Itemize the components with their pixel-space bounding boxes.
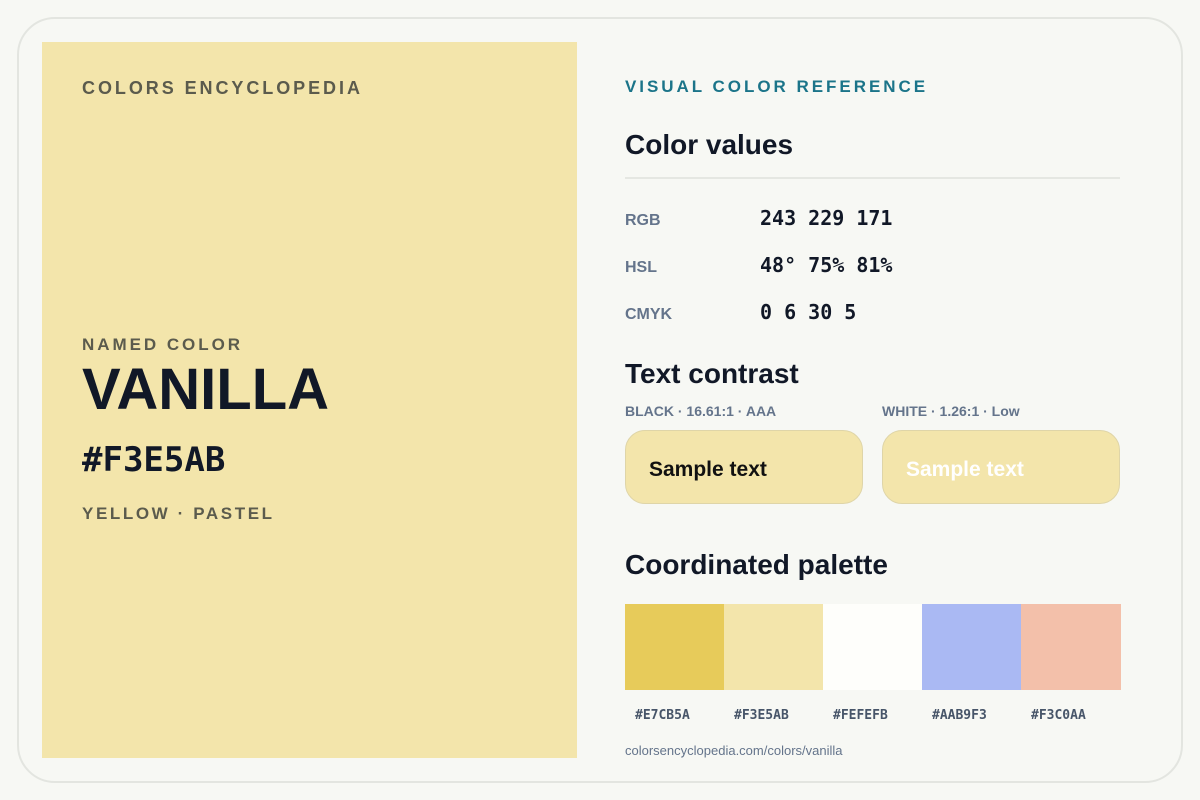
RGB label: RGB bbox=[625, 212, 661, 229]
color name: VANILLA bbox=[82, 357, 329, 422]
CMYK label: CMYK bbox=[625, 306, 672, 323]
palette bbox=[625, 604, 1121, 723]
eyebrow: VISUAL COLOR REFERENCE bbox=[625, 77, 928, 96]
heading: text contrast: Text contrast bbox=[625, 358, 799, 389]
hex code: #F3E5AB bbox=[82, 440, 225, 480]
contrast sample: white bbox=[882, 430, 1120, 504]
hex 3: #FEFEFB bbox=[833, 708, 888, 723]
contrast sample: white: Sample text bbox=[906, 458, 1024, 481]
CMYK value: 0 6 30 5 bbox=[760, 300, 856, 324]
source url: colorsencyclopedia.com/colors/vanilla bbox=[625, 743, 842, 758]
values table bbox=[625, 206, 892, 324]
HSL value: 48° 75% 81% bbox=[760, 253, 892, 277]
contrast sample: black bbox=[625, 430, 863, 504]
hex 5: #F3C0AA bbox=[1031, 708, 1086, 723]
contrast label: white: WHITE · 1.26:1 · Low bbox=[882, 403, 1020, 419]
hex 4: #AAB9F3 bbox=[932, 708, 987, 723]
RGB value: 243 229 171 bbox=[760, 206, 892, 230]
HSL label: HSL bbox=[625, 259, 657, 276]
swatch 3 bbox=[823, 604, 922, 690]
swatch 1 bbox=[625, 604, 724, 690]
swatch 4 bbox=[922, 604, 1021, 690]
named color label: NAMED COLOR bbox=[82, 335, 243, 354]
heading: color values: Color values bbox=[625, 129, 793, 160]
brand label: COLORS ENCYCLOPEDIA bbox=[82, 78, 363, 98]
contrast label: black: BLACK · 16.61:1 · AAA bbox=[625, 403, 776, 419]
heading: coordinated palette: Coordinated palette bbox=[625, 549, 888, 580]
swatch 5 bbox=[1021, 604, 1121, 690]
hex 2: #F3E5AB bbox=[734, 708, 789, 723]
category tags: YELLOW · PASTEL bbox=[82, 504, 275, 523]
swatch 2 bbox=[724, 604, 823, 690]
hex 1: #E7CB5A bbox=[635, 708, 690, 723]
contrast sample: black: Sample text bbox=[649, 458, 767, 481]
panel: color swatch bbox=[42, 42, 577, 758]
